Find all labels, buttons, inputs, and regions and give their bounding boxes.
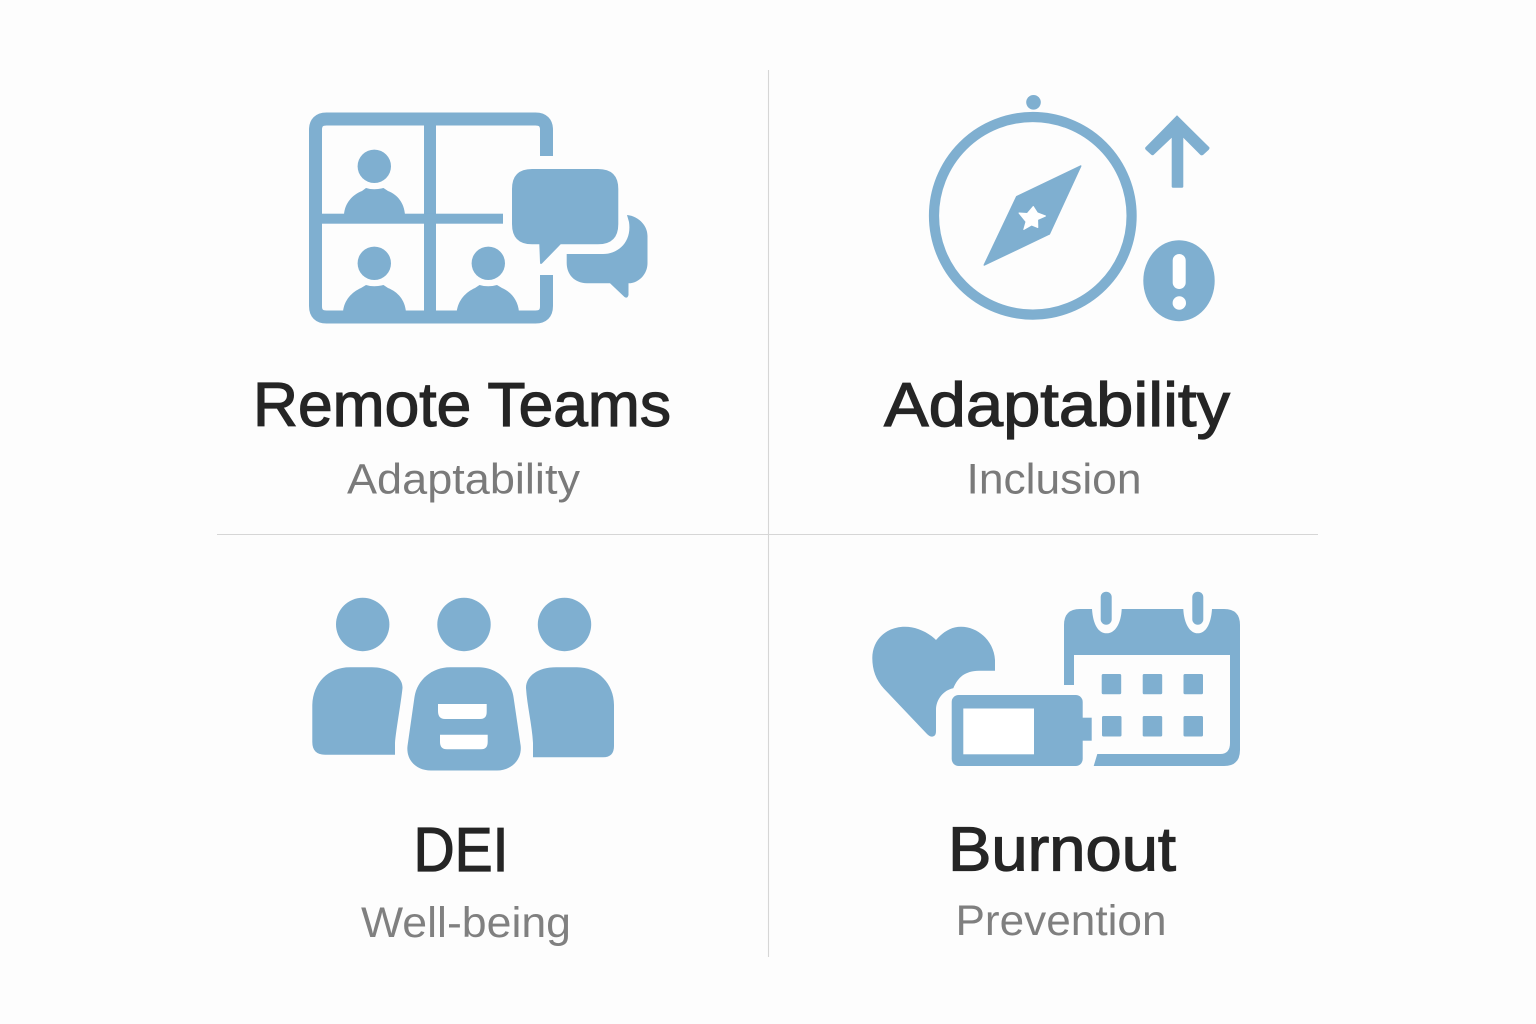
panel: burnout prevention [872,592,1240,945]
heading: Remote Teams: Remote Teams [253,371,671,440]
panel: DEI [312,598,614,947]
icon: compass with arrow and alert [934,95,1215,321]
icon: video call grid with chat bubbles [316,119,648,317]
panel: adaptability [884,95,1230,504]
icon: heart, battery and calendar [872,592,1240,766]
subheading: Inclusion: Inclusion [966,456,1142,504]
subheading: Adaptability: Adaptability [347,456,581,504]
subheading: Prevention: Prevention [956,897,1166,945]
heading: DEI: DEI [414,816,508,885]
subheading: Well-being: Well-being [361,899,571,947]
icon: three people [312,598,614,770]
panel: remote teams [253,119,671,504]
heading: Adaptability: Adaptability [884,371,1230,440]
heading: Burnout: Burnout [948,816,1176,884]
